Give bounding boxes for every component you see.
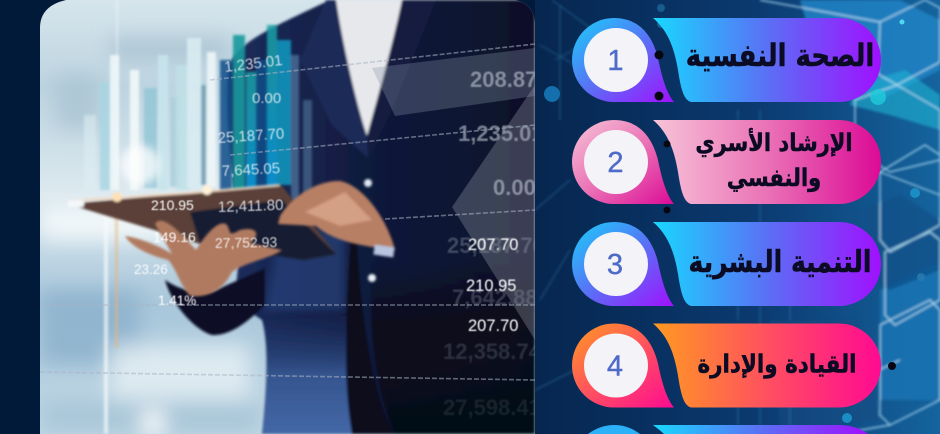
item 2: family and psychological counselling: الإرشاد الأسري <box>695 126 853 157</box>
item 5: partially visible <box>588 425 868 434</box>
data figures: 210.95 <box>466 277 516 295</box>
item 3: human development: 3 <box>607 249 623 281</box>
data figures: 25,187.70 <box>217 125 285 147</box>
panel: business photo <box>40 0 545 434</box>
item 1: mental health: الصحة النفسية <box>686 37 874 74</box>
data figures: 25,187.70 <box>447 233 545 258</box>
connector dot <box>888 362 896 370</box>
item 3: human development <box>572 222 881 306</box>
data figures: 208.87 <box>470 67 537 92</box>
item 3: human development: التنمية البشرية <box>689 244 871 280</box>
data figures: 27,752.93 <box>215 234 278 251</box>
data figures: 0.00 <box>493 175 536 200</box>
data figures: 210.95 <box>151 197 194 213</box>
blurred office backdrop <box>40 38 260 434</box>
data figures: 1,235.01 <box>223 52 283 76</box>
data figures: 12,411.80 <box>218 197 284 216</box>
panel: technology background <box>535 0 940 434</box>
chart bars <box>84 38 216 190</box>
data figures: 27,598.41 <box>443 395 541 420</box>
data figures: 1,235.01 <box>458 121 544 146</box>
gray translucent triangle <box>452 85 535 340</box>
data figures <box>134 52 545 420</box>
item 2: family and psychological counselling <box>572 120 881 214</box>
man in suit <box>165 0 535 434</box>
data figures: 207.70 <box>468 317 518 335</box>
gray translucent band <box>372 48 535 116</box>
data figures: 0.00 <box>252 90 281 107</box>
hands <box>125 179 395 296</box>
tablet <box>68 185 336 260</box>
item 1: mental health <box>572 18 881 102</box>
data figures: 7,642.88 <box>452 285 538 310</box>
item 2: family and psychological counselling: والنفسي <box>727 165 821 192</box>
data figures: 12,358.74 <box>443 339 542 364</box>
data figures: 7,645.05 <box>221 160 281 180</box>
data figures: 1.41% <box>158 293 196 308</box>
item 1: mental health: 1 <box>607 45 624 77</box>
item 4: leadership and management: القيادة والإدارة <box>697 351 857 379</box>
data figures: 149.16 <box>153 229 196 245</box>
item 2: family and psychological counselling: 2 <box>607 147 624 179</box>
flare streaks <box>102 11 163 434</box>
dashed data lines <box>40 44 535 380</box>
item 4: leadership and management: 4 <box>607 350 623 382</box>
teal chart bars over suit <box>218 23 313 201</box>
item 4: leadership and management <box>572 324 881 408</box>
data figures: 23.26 <box>134 262 168 277</box>
data figures: 207.70 <box>468 236 518 254</box>
